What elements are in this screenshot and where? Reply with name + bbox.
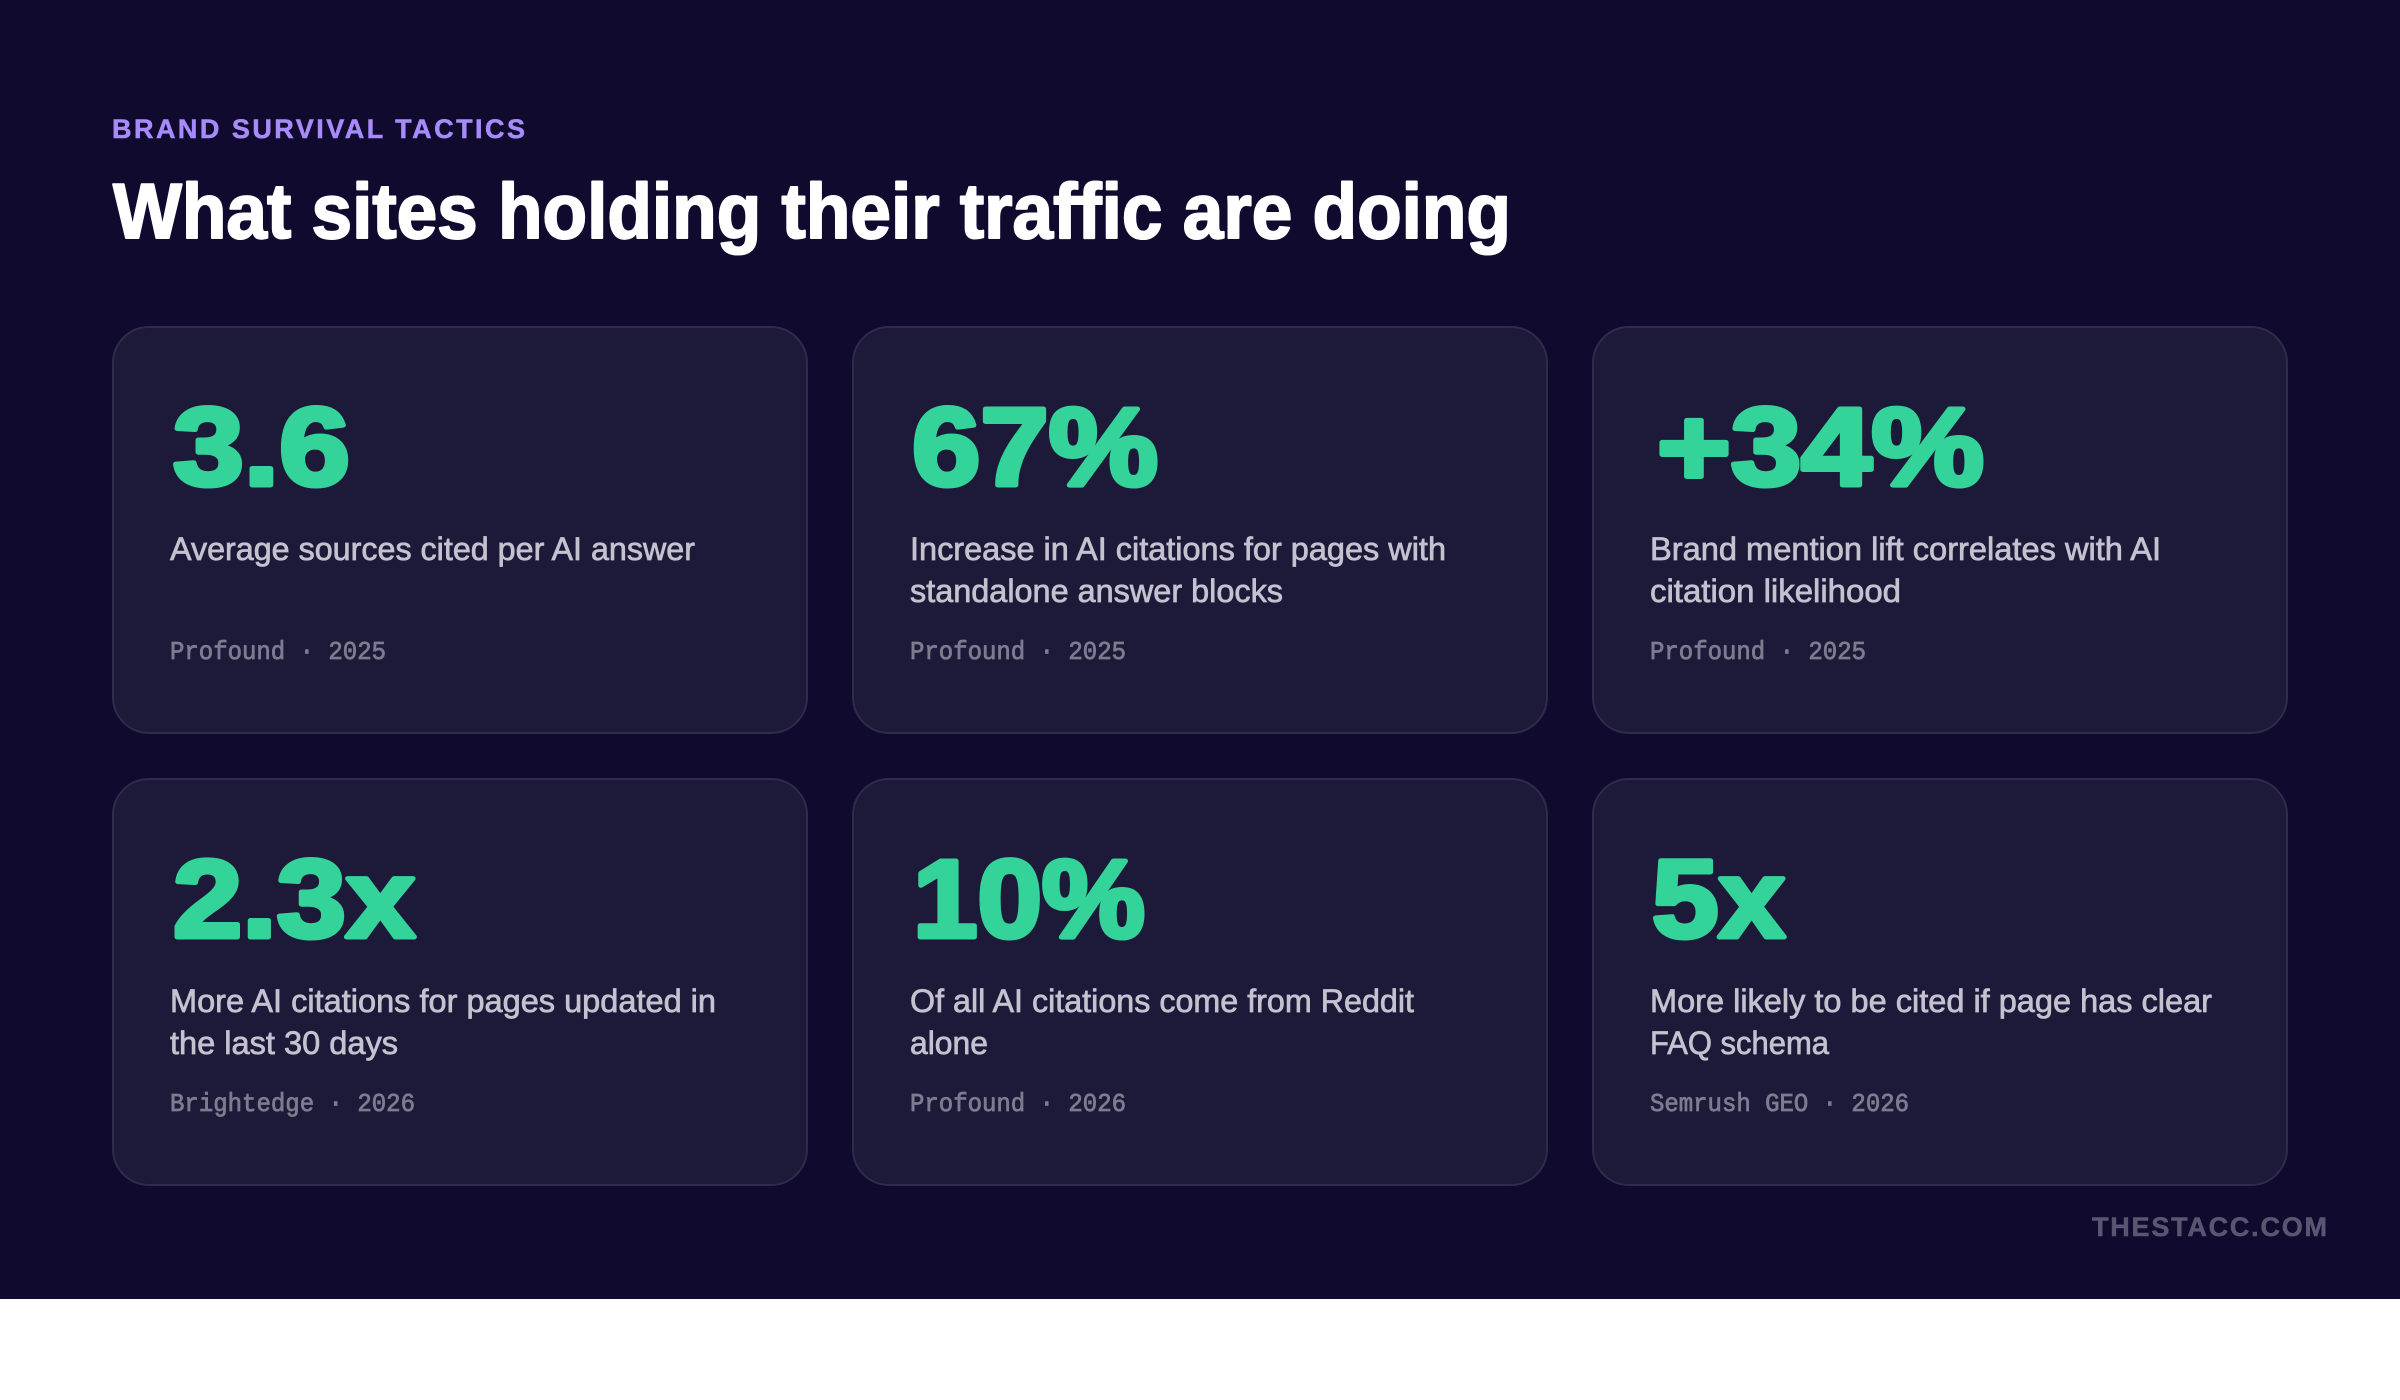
- source: Profound · 2025: [170, 637, 386, 667]
- description: Brand mention lift correlates with AI: [1650, 531, 2161, 567]
- panel: 10% reddit: [853, 779, 1547, 1185]
- stat value: 2.3x: [173, 838, 415, 961]
- panel: 2.3x updated pages: [113, 779, 807, 1185]
- description: citation likelihood: [1650, 573, 1901, 609]
- stat value: +34%: [1657, 386, 1984, 509]
- description: More likely to be cited if page has clear: [1650, 983, 2212, 1019]
- description: Of all AI citations come from Reddit: [910, 983, 1414, 1019]
- panel: 5x FAQ schema: [1593, 779, 2287, 1185]
- source: Semrush GEO · 2026: [1650, 1089, 1909, 1119]
- stat value: 5x: [1652, 838, 1785, 961]
- source: Profound · 2025: [1650, 637, 1866, 667]
- stat value: 3.6: [173, 386, 350, 509]
- title: What sites holding their traffic are doing: [113, 169, 1511, 255]
- source: Brightedge · 2026: [170, 1089, 415, 1119]
- footer brand: THESTACC.COM: [2092, 1212, 2327, 1242]
- description: standalone answer blocks: [910, 573, 1283, 609]
- description: Average sources cited per AI answer: [170, 531, 695, 567]
- panel: 67% answer blocks: [853, 327, 1547, 733]
- panel: 3.6 average sources: [113, 327, 807, 733]
- stat value: 67%: [912, 386, 1158, 509]
- eyebrow label: BRAND SURVIVAL TACTICS: [112, 114, 525, 144]
- description: FAQ schema: [1650, 1025, 1829, 1061]
- description: More AI citations for pages updated in: [170, 983, 716, 1019]
- description: the last 30 days: [170, 1025, 398, 1061]
- stat value: 10%: [913, 838, 1145, 961]
- description: Increase in AI citations for pages with: [910, 531, 1446, 567]
- source: Profound · 2026: [910, 1089, 1126, 1119]
- panel: +34% brand mention: [1593, 327, 2287, 733]
- description: alone: [910, 1025, 988, 1061]
- source: Profound · 2025: [910, 637, 1126, 667]
